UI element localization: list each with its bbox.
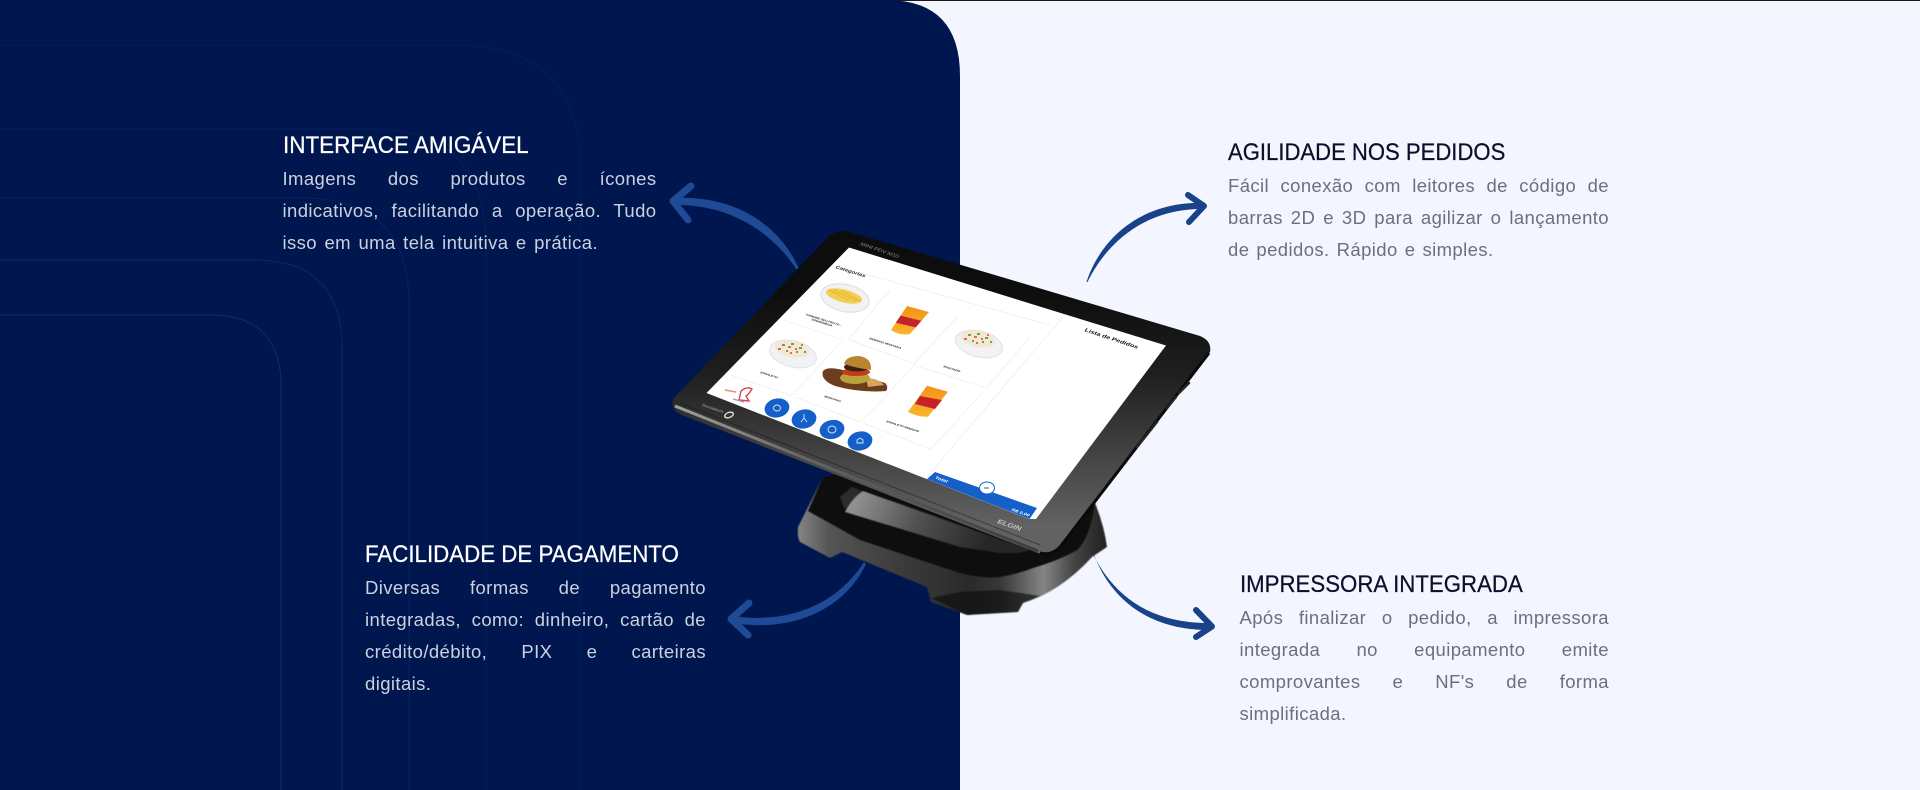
device: printed labels bbox=[702, 242, 1023, 533]
device: printed labels: MINI PDV M10 bbox=[859, 242, 899, 260]
screen: labels: Categorias bbox=[834, 265, 867, 279]
screen: drink two bbox=[908, 386, 948, 417]
screen: card lines bbox=[730, 268, 1063, 477]
screen: total bar bbox=[927, 472, 1037, 519]
body text: crédito/débito, PIX e carteiras bbox=[365, 641, 706, 662]
device: screen bbox=[706, 248, 1166, 519]
body text: Fácil conexão com leitores de código de bbox=[1228, 175, 1609, 196]
screen: labels: RISOTADO bbox=[942, 365, 962, 373]
screen: drink bbox=[891, 306, 929, 334]
screen: round blue buttons bbox=[763, 396, 874, 453]
body text bbox=[1228, 175, 1609, 260]
body text bbox=[282, 168, 656, 253]
screen: labels: ESPALETO bbox=[759, 371, 779, 379]
screen: labels: TURBINE SEU FRUTO - bbox=[804, 313, 842, 327]
device: tablet body bbox=[672, 231, 1210, 554]
heading: INTERFACE AMIGÁVEL bbox=[282, 132, 528, 159]
heading: IMPRESSORA INTEGRADA bbox=[1240, 571, 1522, 598]
body text: comprovantes e NF's de forma bbox=[1240, 671, 1609, 692]
arrow: impressora integrada bbox=[1092, 552, 1212, 637]
text block: impressora integrada bbox=[1240, 571, 1609, 724]
body text: integradas, como: dinheiro, cartão de bbox=[365, 609, 706, 630]
screen: red logo bbox=[725, 388, 752, 402]
body text: indicativos, facilitando a operação. Tudo bbox=[282, 200, 656, 221]
arrow: interface amigavel bbox=[673, 186, 799, 270]
body text: Diversas formas de pagamento bbox=[365, 577, 706, 598]
screen: fries bowl bbox=[818, 280, 872, 316]
body text: integrada no equipamento emite bbox=[1240, 639, 1609, 660]
screen: labels bbox=[759, 265, 1140, 433]
arrow: agilidade nos pedidos bbox=[1086, 195, 1204, 282]
body text: digitais. bbox=[365, 673, 431, 694]
screen: rice bowl two bbox=[767, 336, 819, 372]
body text: Após finalizar o pedido, a impressora bbox=[1240, 607, 1609, 628]
device: stand bbox=[798, 440, 1107, 615]
text block: interface amigavel bbox=[282, 132, 656, 253]
text block: agilidade nos pedidos bbox=[1228, 139, 1609, 260]
screen: labels: ESPALETO BEBIDAS bbox=[885, 420, 920, 433]
text block: facilidade de pagamento bbox=[365, 541, 706, 694]
body text: de pedidos. Rápido e simples. bbox=[1228, 239, 1494, 260]
screen: total bar: Total bbox=[933, 476, 949, 484]
heading: AGILIDADE NOS PEDIDOS bbox=[1228, 139, 1505, 166]
arrow: facilidade de pagamento bbox=[731, 562, 866, 635]
screen: total bar: R$ 0,00 bbox=[1010, 508, 1031, 518]
body text bbox=[365, 577, 706, 694]
screen: labels: MONTANA bbox=[823, 395, 843, 403]
body text: barras 2D e 3D para agilizar o lançamento bbox=[1228, 207, 1609, 228]
screen: burger bbox=[822, 356, 887, 391]
body text: simplificada. bbox=[1240, 703, 1346, 724]
device: printed labels: bematech bbox=[702, 403, 725, 414]
heading: FACILIDADE DE PAGAMENTO bbox=[365, 541, 679, 568]
device: side buttons bbox=[1137, 383, 1189, 447]
screen: rice bowl bbox=[953, 326, 1005, 362]
body text bbox=[1240, 607, 1609, 724]
device: printed labels: ELGIN bbox=[996, 517, 1023, 533]
screen: labels: BEBIDAS MONTANA bbox=[868, 337, 903, 350]
body text: Imagens dos produtos e ícones bbox=[282, 168, 656, 189]
body text: isso em uma tela intuitiva e prática. bbox=[282, 232, 598, 253]
screen: labels: Lista de Pedidos bbox=[1083, 328, 1140, 350]
screen: labels: SOBREMESA bbox=[810, 318, 834, 328]
